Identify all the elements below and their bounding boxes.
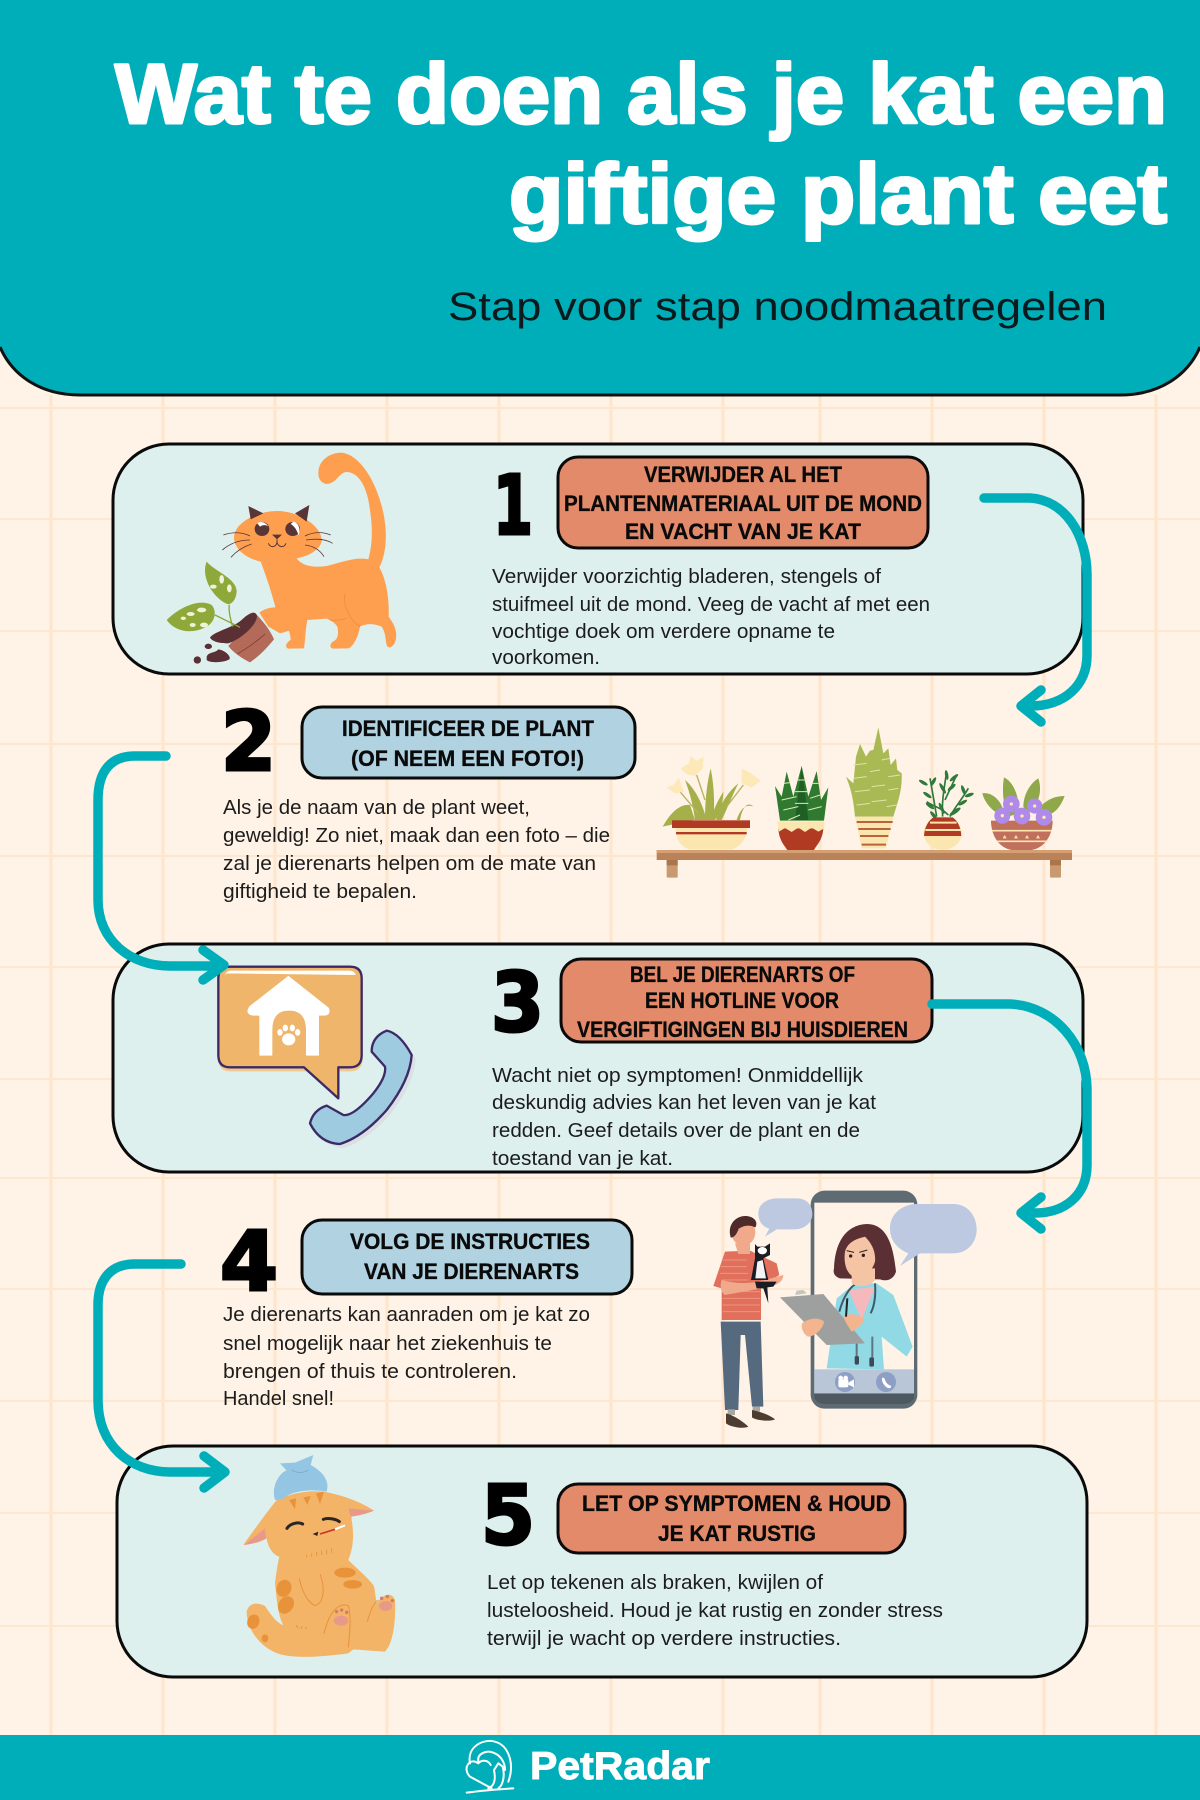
step 3 body text: redden. Geef details over de plant en de: [492, 1119, 860, 1142]
step 4 body text: Handel snel!: [223, 1387, 334, 1410]
panel: step 4: [220, 1215, 632, 1410]
header banner: [0, 0, 1200, 395]
step number 1: 1: [493, 459, 533, 554]
step 1 body text: [492, 565, 930, 669]
step 5 heading badge: [558, 1484, 905, 1553]
illustration: sick cat with ice bag: [243, 1455, 395, 1657]
step 3 body text: Wacht niet op symptomen! Onmiddellijk: [492, 1064, 864, 1087]
step 3 heading badge: [561, 959, 932, 1042]
logo: PetRadar icon: [467, 1741, 513, 1793]
step 5 body text: lusteloosheid. Houd je kat rustig en zonder stress: [487, 1599, 943, 1622]
illustration: cat with knocked over plant: [167, 453, 396, 664]
illustration: potted plants on shelf: [657, 727, 1072, 878]
panel: step 5: [117, 1446, 1087, 1677]
step number 3: 3: [491, 956, 544, 1051]
step number 5: 5: [481, 1469, 535, 1564]
step 1 body text: stuifmeel uit de mond. Veeg de vacht af met een: [492, 593, 930, 616]
step 2 body text: giftigheid te bepalen.: [223, 880, 417, 903]
title: Wat te doen als je kat een: [115, 47, 1167, 141]
footer bar: [0, 1735, 1200, 1800]
step 2 heading badge: IDENTIFICEER DE PLANT: [342, 716, 594, 741]
title: [115, 47, 1167, 241]
arrow: step 1 to step 2: [984, 498, 1087, 722]
title: giftige plant eet: [509, 147, 1167, 241]
arrow: step 4 to step 5: [98, 1264, 225, 1488]
step 1 body text: Verwijder voorzichtig bladeren, stengels of: [492, 565, 881, 588]
subtitle: Stap voor stap noodmaatregelen: [448, 285, 1107, 329]
panel: step 1: [113, 444, 1083, 674]
step 4 body text: Je dierenarts kan aanraden om je kat zo: [223, 1303, 590, 1326]
step 2 body text: [223, 796, 610, 903]
step 3 body text: deskundig advies kan het leven van je kat: [492, 1091, 876, 1114]
arrow: step 3 to step 4: [932, 1004, 1087, 1229]
step 4 body text: brengen of thuis te controleren.: [223, 1360, 517, 1383]
step 4 heading badge: VAN JE DIERENARTS: [364, 1259, 579, 1284]
step 4 heading badge: [302, 1220, 632, 1294]
illustration: video call with vet: [713, 1191, 977, 1428]
step 2 body text: zal je dierenarts helpen om de mate van: [223, 852, 596, 875]
step 5 heading badge: JE KAT RUSTIG: [658, 1521, 816, 1546]
step 1 heading badge: PLANTENMATERIAAL UIT DE MOND: [564, 491, 922, 516]
step 4 body text: snel mogelijk naar het ziekenhuis te: [223, 1332, 552, 1355]
step 1 heading badge: EN VACHT VAN JE KAT: [625, 519, 861, 544]
step 1 body text: vochtige doek om verdere opname te: [492, 620, 835, 643]
step 4 body text: [223, 1303, 590, 1410]
arrow: step 2 to step 3: [98, 756, 224, 980]
step 5 body text: Let op tekenen als braken, kwijlen of: [487, 1571, 823, 1594]
step 1 heading badge: [558, 457, 928, 548]
step 5 body text: [487, 1571, 943, 1650]
step 1 heading badge: VERWIJDER AL HET: [644, 462, 842, 487]
step 2 body text: geweldig! Zo niet, maak dan een foto – die: [223, 824, 610, 847]
step 1 body text: voorkomen.: [492, 646, 600, 669]
brand name: PetRadar: [530, 1745, 710, 1788]
panel: step 2: [221, 695, 635, 903]
step 5 heading badge: LET OP SYMPTOMEN & HOUD: [582, 1491, 891, 1516]
step number 2: 2: [221, 695, 276, 790]
step 3 body text: [492, 1064, 876, 1170]
step 4 heading badge: VOLG DE INSTRUCTIES: [350, 1229, 590, 1254]
step 2 body text: Als je de naam van de plant weet,: [223, 796, 530, 819]
step 3 body text: toestand van je kat.: [492, 1147, 673, 1170]
step 2 heading badge: [302, 707, 635, 778]
step 3 heading badge: VERGIFTIGINGEN BIJ HUISDIEREN: [577, 1017, 908, 1042]
icon: phone with vet speech bubble: [218, 967, 416, 1148]
step 2 heading badge: (OF NEEM EEN FOTO!): [351, 746, 584, 771]
step number 4: 4: [220, 1215, 278, 1310]
step 3 heading badge: BEL JE DIERENARTS OF: [630, 962, 855, 987]
step 5 body text: terwijl je wacht op verdere instructies.: [487, 1627, 841, 1650]
step 3 heading badge: EEN HOTLINE VOOR: [645, 988, 839, 1013]
panel: step 3: [113, 944, 1083, 1172]
